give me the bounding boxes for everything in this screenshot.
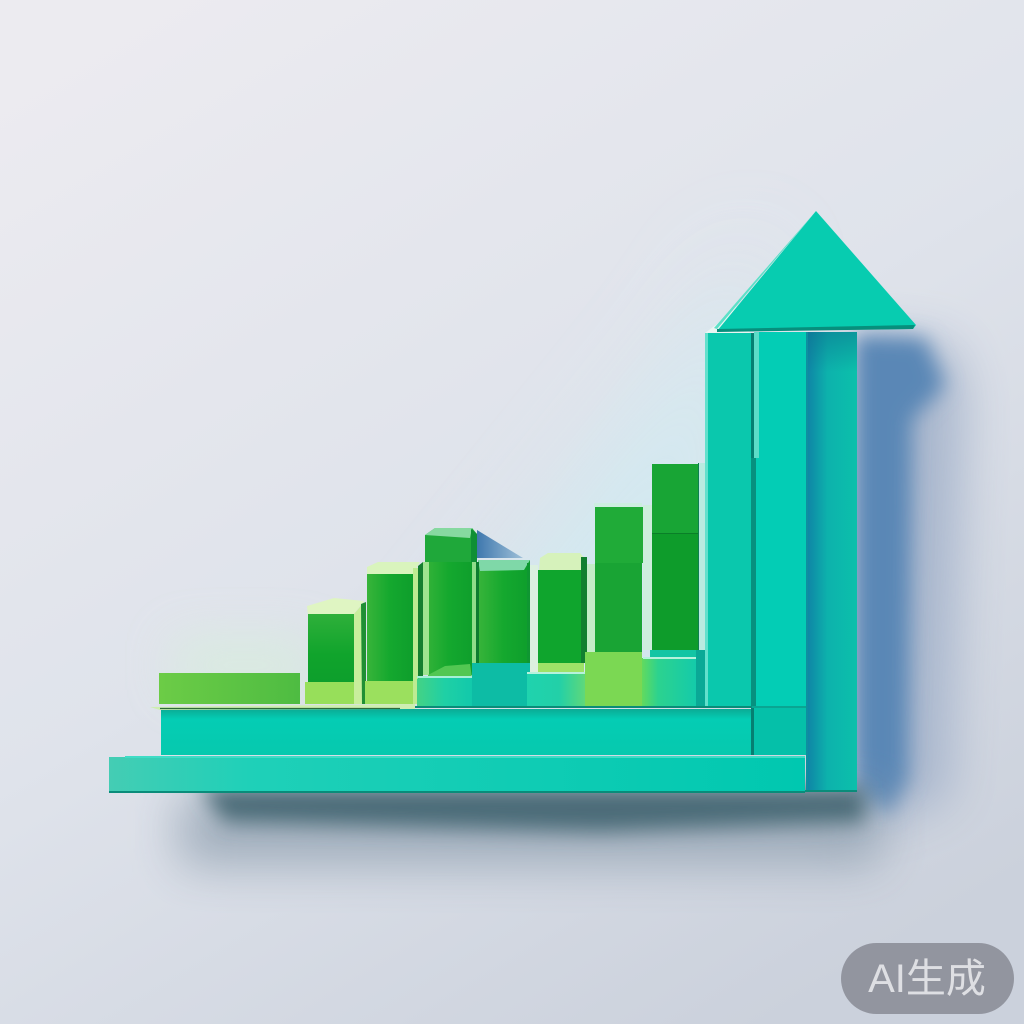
soft glows and shadows on wall [175, 230, 965, 865]
thin shelf [150, 704, 415, 710]
bar 6 [527, 553, 595, 707]
arrow head [705, 211, 916, 333]
AI badge [841, 943, 1014, 1014]
AI badge: AI生成 [868, 957, 986, 1001]
bar 2 [305, 598, 366, 704]
arrow shaft: left column [705, 333, 754, 708]
shelf line under bars [415, 706, 751, 708]
bar 8: tallest [642, 463, 705, 707]
bar 1: low flat block [159, 673, 300, 704]
bar 5 [472, 560, 530, 707]
bar 3 [365, 562, 423, 704]
bar 4: tallest of first group [417, 528, 523, 707]
bar 7 [585, 503, 643, 707]
arrow shaft: middle column [751, 332, 808, 791]
base: bottom bar [109, 756, 857, 793]
base: middle bar [161, 708, 754, 755]
arrow shaft: back column [808, 332, 857, 791]
